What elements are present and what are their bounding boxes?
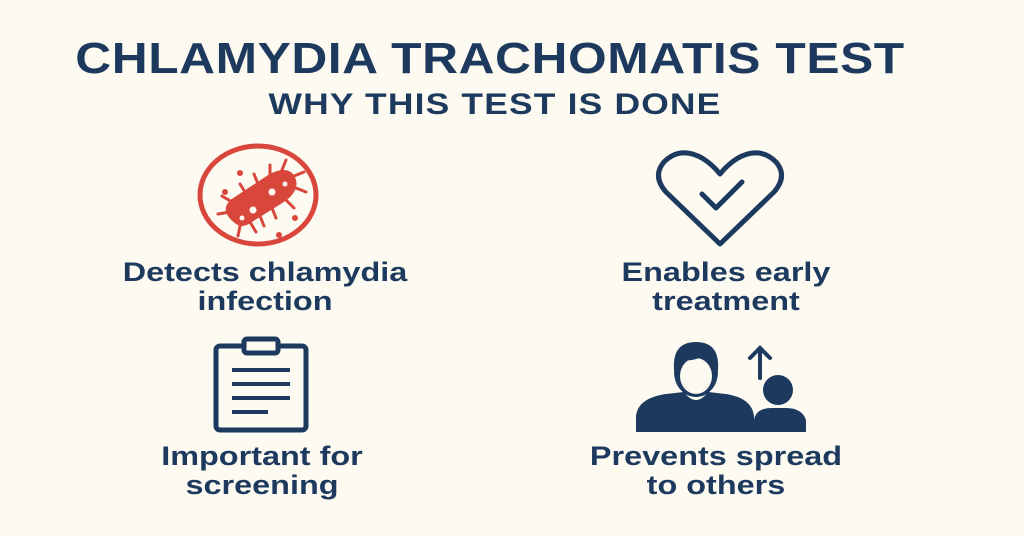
icon: clipboard <box>214 336 308 432</box>
subtitle: WHY THIS TEST IS DONE <box>269 88 721 121</box>
label: early treatment: Enables early <box>622 257 830 287</box>
label: prevents spread: to others <box>647 470 785 500</box>
icon: people <box>636 342 806 432</box>
label: detects: infection <box>197 286 332 316</box>
label: early treatment: treatment <box>652 286 800 316</box>
icon: bacteria <box>198 144 318 246</box>
label: screening: screening <box>185 470 339 500</box>
label: early treatment <box>622 257 830 316</box>
label: detects <box>123 257 408 316</box>
label: prevents spread: Prevents spread <box>590 441 842 471</box>
label: prevents spread <box>590 441 842 500</box>
label: screening: Important for <box>161 441 363 471</box>
icon: heart check <box>656 150 784 246</box>
title: CHLAMYDIA TRACHOMATIS TEST <box>75 34 905 83</box>
label: screening <box>161 441 363 500</box>
label: detects: Detects chlamydia <box>123 257 407 287</box>
